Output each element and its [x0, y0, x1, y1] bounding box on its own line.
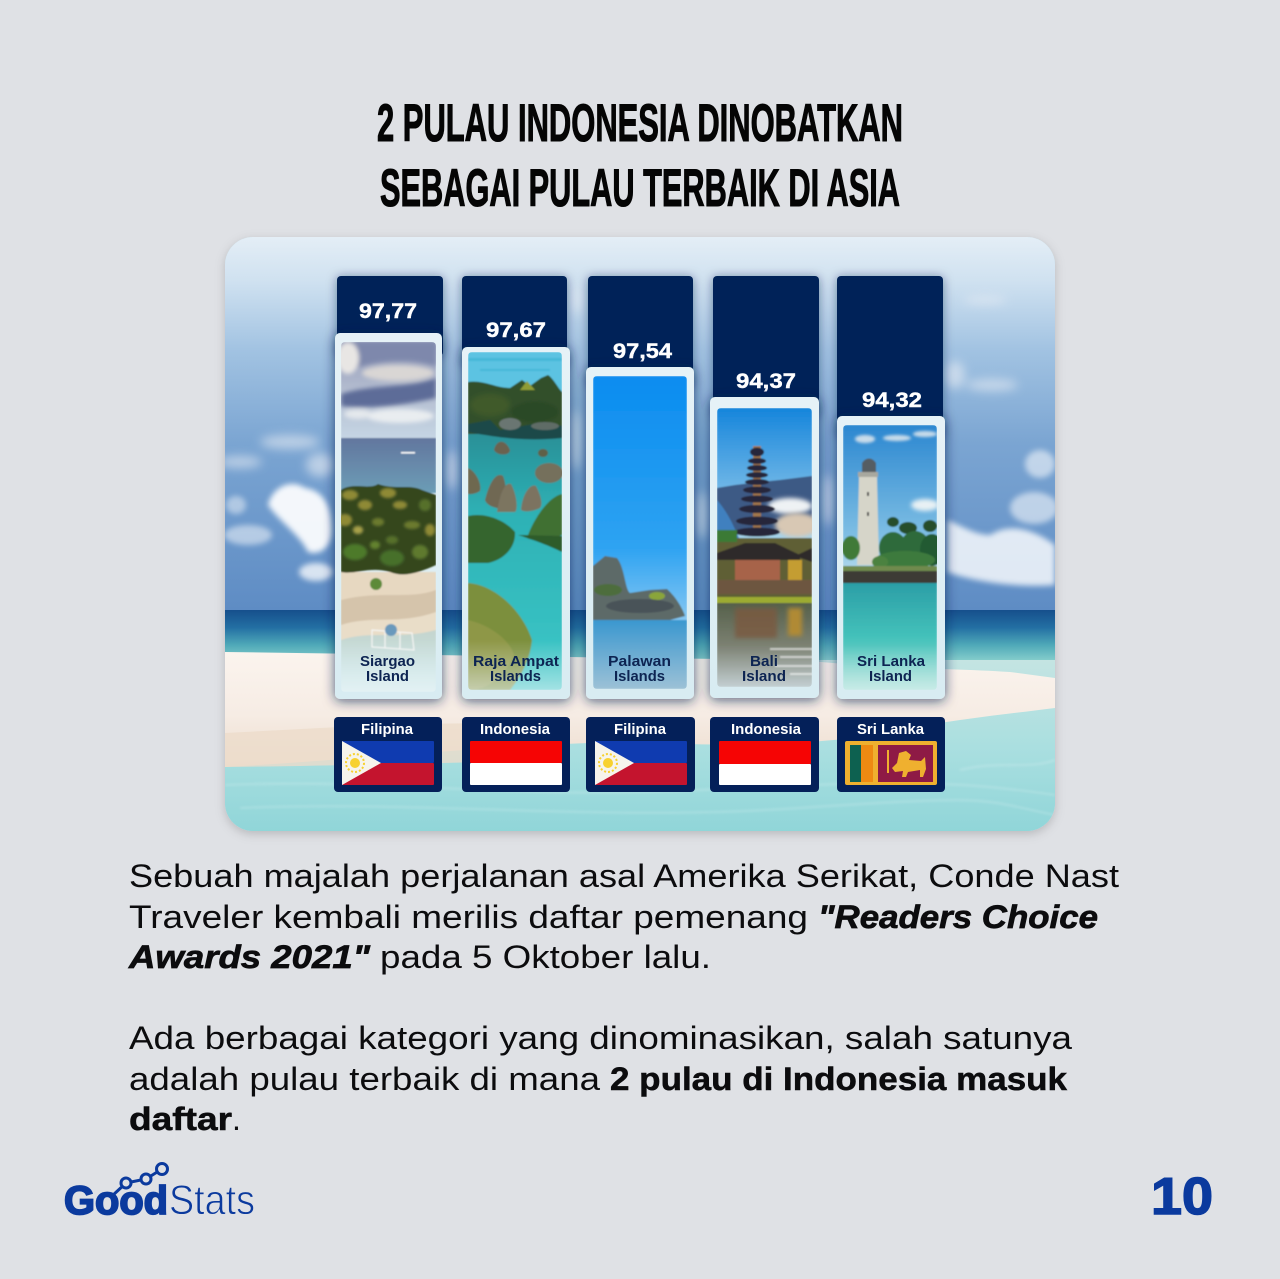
panel: beach photo chart card	[218, 237, 1058, 835]
beach background photo	[218, 237, 1058, 835]
photo card frames	[335, 333, 945, 699]
country flag card: Filipina	[334, 717, 442, 792]
body paragraph 1: pada 5 Oktober lalu.	[380, 939, 711, 975]
country flag card: Indonesia: Indonesia	[480, 722, 551, 738]
country flag card: Filipina: Filipina	[614, 722, 667, 738]
island name labels: Bali	[750, 654, 778, 670]
island name labels: Island	[742, 669, 786, 685]
title: 2 PULAU INDONESIA DINOBATKAN	[377, 94, 903, 153]
country flag card: Sri Lanka	[837, 717, 945, 792]
photo: Raja Ampat Islands	[468, 352, 563, 690]
photo: Sri Lanka Island	[842, 425, 944, 690]
body paragraph 2	[129, 1020, 1072, 1137]
score values: 97,67	[486, 319, 546, 342]
photo: Siargao Island	[337, 342, 436, 692]
body paragraph 1: Sebuah majalah perjalanan asal Amerika Serikat, Conde Nast	[129, 858, 1119, 894]
body paragraph 1: Traveler kembali merilis daftar pemenang	[129, 899, 808, 935]
title: SEBAGAI PULAU TERBAIK DI ASIA	[380, 159, 900, 218]
country flag card: Indonesia	[710, 717, 819, 792]
score values: 94,37	[736, 370, 796, 393]
island name labels: Sri Lanka	[857, 654, 926, 670]
dark score bars	[337, 276, 943, 436]
logo: GoodStats: Stats	[169, 1176, 255, 1223]
body paragraph 2: .	[232, 1101, 241, 1137]
body paragraph 1: Awards 2021"	[128, 939, 371, 975]
island name labels: Islands	[614, 669, 665, 685]
island name labels: Raja Ampat	[473, 654, 559, 670]
island name labels: Island	[366, 669, 409, 685]
country flag card: Filipina: Filipina	[361, 722, 414, 738]
page number: 10	[1151, 1168, 1213, 1226]
island name labels: Palawan	[608, 654, 671, 670]
score values: 97,77	[359, 300, 417, 323]
photo: Palawan Islands	[593, 376, 687, 689]
score values: 97,54	[613, 340, 672, 363]
body paragraph 2: 2 pulau di Indonesia masuk	[610, 1061, 1067, 1097]
body paragraph 1: "Readers Choice	[818, 899, 1098, 935]
title	[377, 94, 903, 218]
country flag card: Filipina	[586, 717, 695, 792]
island name labels: Siargao	[360, 654, 415, 670]
score values	[359, 300, 922, 412]
island name labels	[360, 655, 926, 681]
body paragraph 1	[128, 858, 1119, 975]
photo: Bali Island	[717, 408, 819, 687]
body paragraph 2: daftar	[129, 1101, 232, 1137]
country flag card: Indonesia	[462, 717, 570, 792]
country flag card: Sri Lanka: Sri Lanka	[857, 722, 925, 738]
score values: 94,32	[862, 389, 922, 412]
island name labels: Islands	[490, 669, 541, 685]
island name labels: Island	[869, 669, 912, 685]
logo: GoodStats	[64, 1164, 255, 1223]
body paragraph 2: adalah pulau terbaik di mana	[129, 1061, 600, 1097]
logo: GoodStats: Good	[64, 1179, 168, 1223]
country flag card: Indonesia: Indonesia	[731, 722, 802, 738]
body paragraph 2: Ada berbagai kategori yang dinominasikan, salah satunya	[129, 1020, 1072, 1056]
